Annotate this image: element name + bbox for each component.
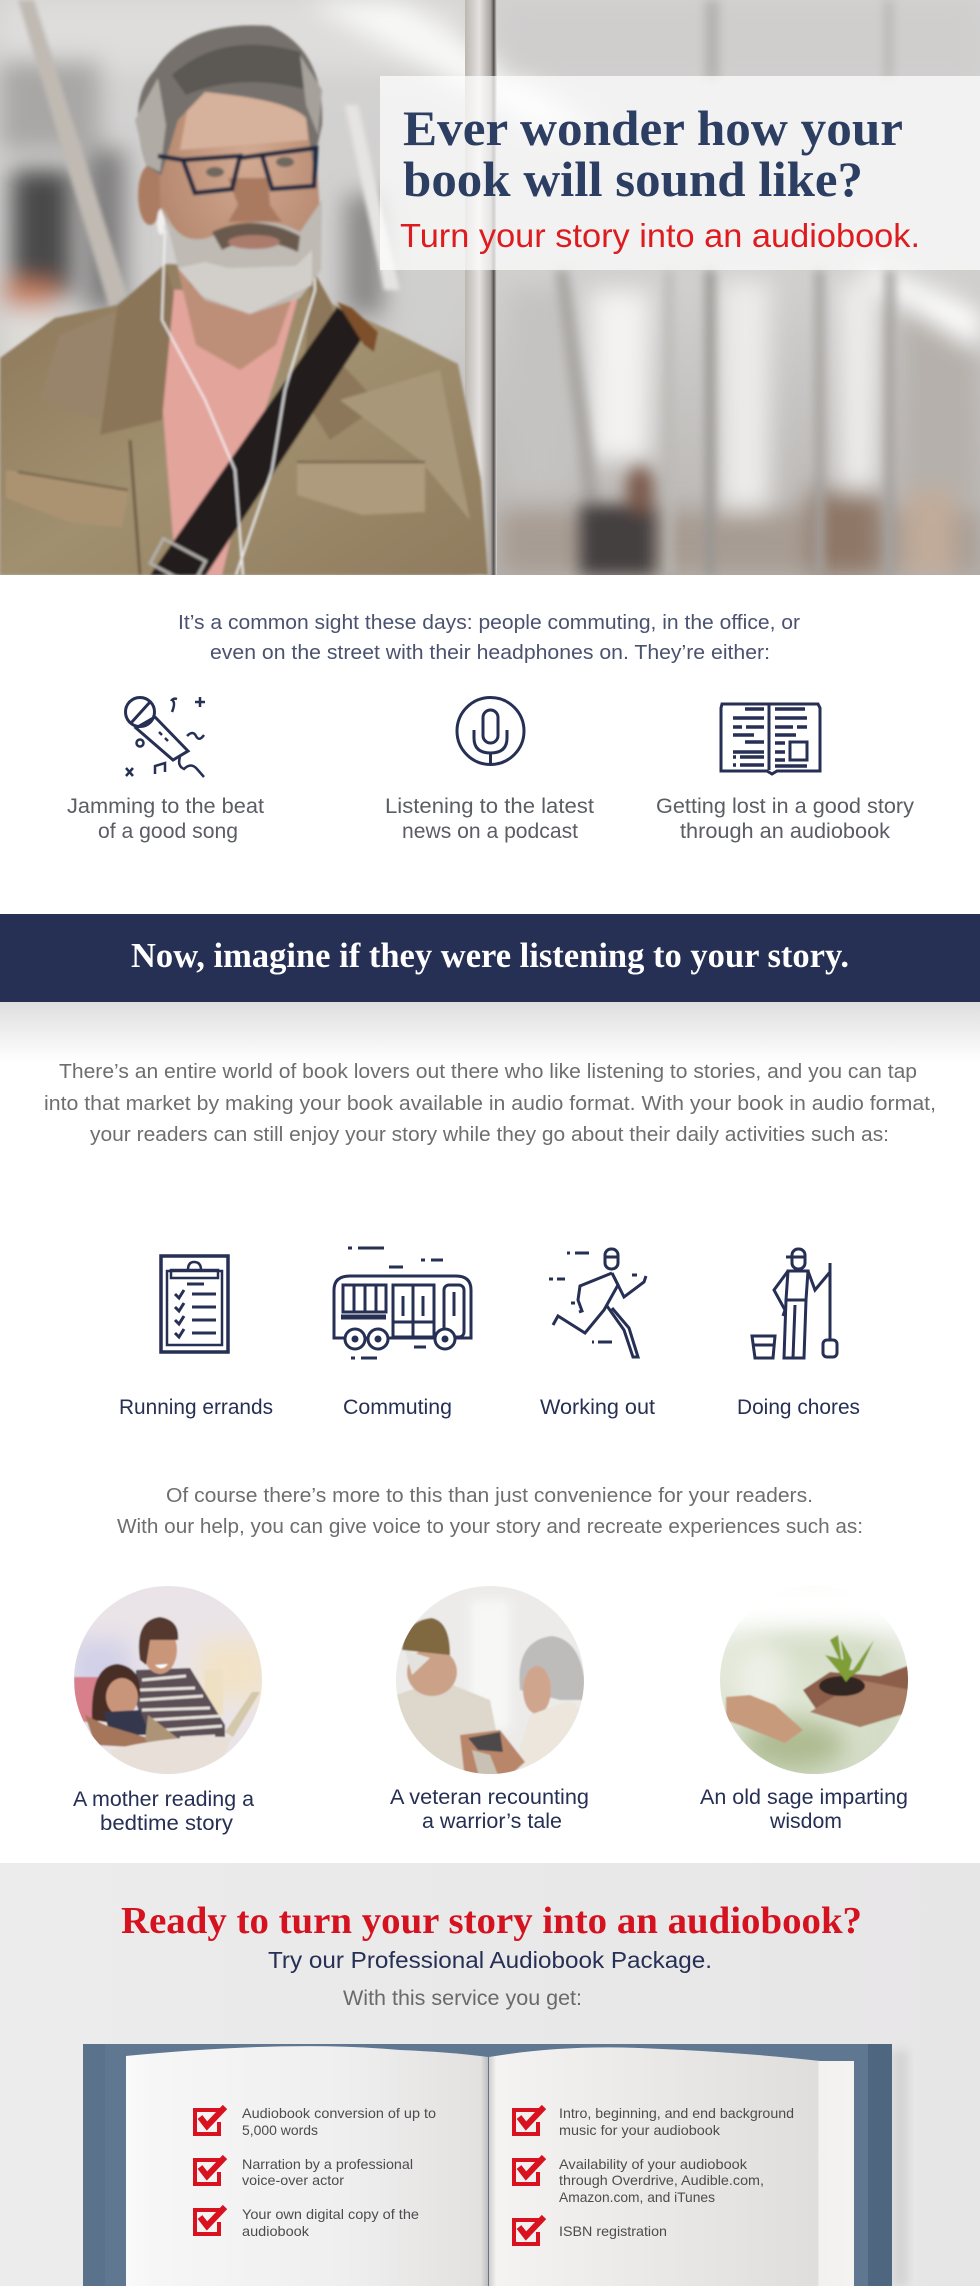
experience captions: wisdom: [769, 1810, 842, 1833]
photo: veteran: [396, 1586, 584, 1774]
hero title: [403, 100, 903, 207]
checklist: right column: Availability of your audiobook: [559, 2156, 748, 2172]
experience captions: a warrior’s tale: [422, 1810, 562, 1833]
icon: person mopping: [752, 1249, 837, 1358]
experience captions: bedtime story: [100, 1812, 234, 1835]
checklist: left column: voice-over actor: [242, 2172, 344, 2188]
icon: podcast microphone: [457, 698, 524, 765]
banner: Now, imagine if they were listening to your story.: [131, 936, 849, 975]
icon: runner: [549, 1249, 646, 1357]
hair: [138, 25, 322, 176]
checklist: right column: ISBN registration: [559, 2223, 667, 2239]
earphone cable: [162, 230, 243, 575]
audio market paragraph: There’s an entire world of book lovers out there who like listening to stories, and you can tap: [59, 1061, 917, 1083]
icon: open book: [721, 704, 820, 774]
glasses: [158, 148, 316, 193]
face: [158, 110, 321, 241]
CTA subheading: Try our Professional Audiobook Package.: [268, 1947, 712, 1973]
daily activity labels: [119, 1396, 860, 1419]
checklist: left column: Narration by a professional: [242, 2156, 413, 2172]
convenience paragraph: Of course there’s more to this than just convenience for your readers.: [166, 1485, 813, 1507]
convenience paragraph: [117, 1485, 863, 1538]
blurred passengers: [580, 466, 655, 575]
checklist: right column: through Overdrive, Audible.com,: [559, 2172, 764, 2188]
photo: mother reading: [74, 1586, 262, 1774]
experience captions: An old sage imparting: [700, 1786, 908, 1809]
intro text: It’s a common sight these days: people commuting, in the office, or: [178, 612, 800, 634]
book cover: [83, 2044, 908, 2286]
right page: [489, 2047, 854, 2286]
icon: bus: [334, 1248, 471, 1358]
convenience paragraph: With our help, you can give voice to your story and recreate experiences such as:: [117, 1516, 863, 1538]
man figure: [0, 25, 488, 586]
hero text panel: [380, 76, 980, 270]
intro text: [178, 612, 800, 664]
fade below banner: [0, 1002, 980, 1062]
activity labels: Jamming to the beat: [67, 795, 264, 818]
checklist: left column: [195, 2105, 436, 2239]
daily activity labels: Working out: [540, 1396, 655, 1419]
activity labels: Listening to the latest: [385, 795, 594, 818]
activity labels: Getting lost in a good story: [656, 795, 915, 818]
icon: clipboard checklist: [161, 1256, 228, 1352]
activity labels: of a good song: [98, 820, 238, 843]
checklist: left column: audiobook: [242, 2223, 310, 2239]
experience captions: [73, 1786, 908, 1835]
audio market paragraph: into that market by making your book available in audio format. With your book in audio format,: [44, 1093, 936, 1115]
checklist: right column: [514, 2105, 794, 2244]
shoulder strap: [150, 307, 369, 575]
intro text: even on the street with their headphones on. They’re either:: [210, 642, 770, 664]
checklist: left column: Your own digital copy of the: [242, 2206, 419, 2222]
daily activity labels: Running errands: [119, 1396, 273, 1419]
daily activity labels: Doing chores: [737, 1396, 860, 1419]
hero title: book will sound like?: [403, 151, 863, 207]
photo: old sage: [720, 1619, 908, 1774]
experience captions: A mother reading a: [73, 1788, 254, 1811]
checklist: right column: music for your audiobook: [559, 2122, 721, 2138]
hero pole: [465, 0, 497, 575]
service lead-in: With this service you get:: [343, 1987, 582, 2010]
activity labels: through an audiobook: [680, 820, 891, 843]
left page: [126, 2046, 488, 2286]
experience captions: A veteran recounting: [390, 1786, 589, 1809]
daily activity labels: Commuting: [343, 1396, 452, 1419]
beard: [163, 200, 322, 314]
checklist: left column: 5,000 words: [242, 2122, 318, 2138]
banner: [0, 914, 980, 1002]
ear: [138, 165, 162, 225]
hero photo: commuter with earphones on a train: [0, 0, 980, 586]
icon: karaoke microphone: [126, 697, 205, 777]
CTA heading: Ready to turn your story into an audiobook?: [121, 1900, 862, 1942]
checklist: right column: Intro, beginning, and end background: [559, 2105, 794, 2121]
hero title: Ever wonder how your: [403, 100, 903, 156]
audio market paragraph: [44, 1061, 936, 1146]
hero subtitle: Turn your story into an audiobook.: [400, 217, 920, 254]
panel: call to action: [0, 1863, 980, 2286]
activity labels: [67, 795, 915, 843]
checklist: left column: Audiobook conversion of up to: [242, 2105, 436, 2121]
checklist: right column: Amazon.com, and iTunes: [559, 2189, 715, 2205]
audio market paragraph: your readers can still enjoy your story while they go about their daily activities such as:: [90, 1124, 889, 1146]
activity labels: news on a podcast: [402, 820, 578, 843]
